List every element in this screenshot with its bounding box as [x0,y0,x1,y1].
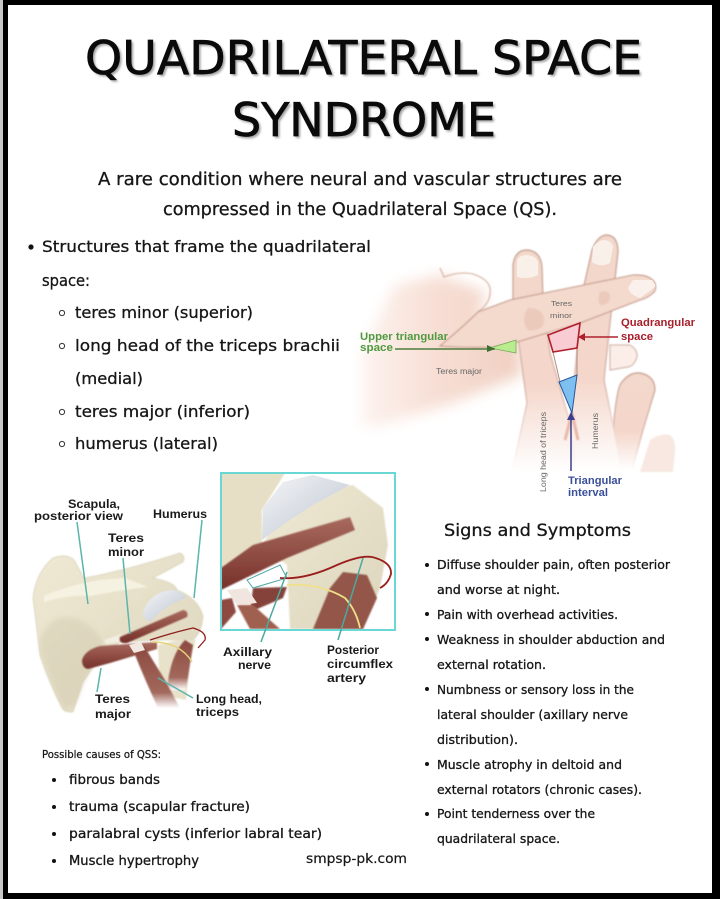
scapula bone [33,553,203,712]
list: signs and symptoms: Diffuse shoulder pain, often posterior [437,557,671,572]
list: signs and symptoms: external rotation. [437,657,546,672]
list: possible causes of QSS: fibrous bands [69,773,160,788]
subtitle: A rare condition where neural and vascular structures are [98,169,622,190]
illustration: scapula posterior view: triceps [196,705,239,719]
illustration: scapula posterior view [33,497,262,721]
list: signs and symptoms: distribution). [437,732,518,747]
tendon patch [104,634,122,644]
triangular interval [559,375,577,413]
label: long head triceps: Long head, [196,692,262,706]
illustration: hand model of the spaces: space [360,342,393,354]
cartilage [262,475,350,540]
scapula spine shading [44,578,148,602]
knuckle outline [440,268,490,312]
list: structures that frame the space: humerus (lateral) [75,434,218,453]
label: teres minor: Teres [551,299,572,308]
illustration: inset close-up [221,473,395,685]
list: structures that frame the space: space: [42,271,90,290]
list: signs and symptoms: and worse at night. [437,582,560,597]
title: QUADRILATERAL SPACE [87,33,644,87]
list: structures that frame the space: long head of the triceps brachii [75,336,340,355]
label: teres major: Teres [95,692,130,706]
list: structures that frame the space: teres minor (superior) [75,303,253,322]
list: signs and symptoms: external rotators (chronic cases). [437,782,642,797]
title: SYNDROME [232,93,496,147]
humerus bone [262,485,388,629]
vertical muscle shading [553,348,577,382]
list: structures that frame the space: (medial) [75,369,143,388]
list: signs and symptoms: Point tenderness over the [437,806,595,821]
list: signs and symptoms: quadrilateral space. [437,831,560,846]
teres major stub [250,587,287,612]
list: possible causes of QSS: Possible causes of QSS: [42,749,161,761]
triceps [237,605,280,629]
small finger [605,373,655,470]
upper triangular space [490,340,516,353]
finger: long head of triceps [512,250,575,472]
thumb remnant [640,435,675,472]
title: QUADRILATERAL SPACE [85,31,642,85]
quadrangular space [548,323,580,352]
illustration: hand model of the spaces [360,235,696,499]
illustration: inset close-up: artery [327,671,366,685]
subtitle: compressed in the Quadrilateral Space (QS). [163,199,557,220]
folded finger [610,345,637,370]
second triceps head [167,640,193,690]
pointer lines [77,520,202,698]
list: possible causes of QSS: Muscle hypertrophy [69,854,199,869]
illustration: hand model of the spaces: space [621,331,653,343]
title [85,31,644,149]
website credit: smpsp-pk.com [306,851,407,867]
upper left bone [221,473,285,575]
finger: humerus [565,235,622,472]
humeral shaft [158,640,196,700]
list: signs and symptoms [425,557,671,846]
illustration: scapula posterior view: major [95,707,131,721]
list: signs and symptoms: Weakness in shoulder abduction and [437,632,665,647]
list: signs and symptoms: lateral shoulder (axillary nerve [437,707,628,722]
list: signs and symptoms: Pain with overhead activities. [437,607,618,622]
illustration: scapula posterior view: posterior view [34,509,124,523]
teres minor muscle [120,610,188,643]
heading: signs and symptoms: Signs and Symptoms [444,521,631,541]
title: SYNDROME [234,95,498,149]
inset border [221,473,395,630]
pointer lines [261,558,363,642]
nerve [287,585,360,628]
label: upper triangular space: Upper triangular [360,331,449,343]
artery [280,557,391,588]
list: structures that frame the space: teres major (inferior) [75,402,250,421]
label: axillary nerve: Axillary [223,645,272,659]
artery and nerve [150,628,205,648]
illustration: scapula posterior view: minor [108,545,144,559]
label: teres minor: Teres [108,531,144,545]
label: quadrangular space: Quadrangular [621,317,696,329]
knuckle creases [524,291,610,330]
label: scapula: Scapula, [68,497,120,511]
teres minor [221,517,355,590]
label: humerus: Humerus [153,507,207,521]
tendon band [227,588,257,605]
forearm, fading to the left [362,275,522,428]
spaces arrows [395,337,618,471]
scapula shaded blade [40,618,105,708]
teres major muscle [82,642,157,669]
right muscle [313,572,377,629]
tendon band [129,642,145,653]
list: possible causes of QSS: paralabral cysts (inferior labral tear) [69,827,322,842]
illustration: inset close-up: nerve [238,658,271,672]
list: structures that frame the space: Structures that frame the quadrilateral [42,237,371,256]
fingernails [517,255,538,278]
subtitle [98,169,622,220]
illustration: inset close-up: circumflex [327,657,393,671]
finger: teres minor [440,275,656,347]
label: long head of triceps: Long head of triceps [539,412,548,492]
triceps long head [133,646,180,708]
window opening [247,565,287,588]
list: signs and symptoms: Numbness or sensory loss in the [437,682,634,697]
label: triangular interval: Triangular [568,475,623,487]
list: structures that frame the space [28,237,371,453]
illustration: hand model of the spaces: minor [550,311,573,320]
list: possible causes of QSS [42,749,322,869]
humeral head cartilage [143,590,186,622]
label: humerus: Humerus [591,413,600,449]
list: possible causes of QSS: trauma (scapular fracture) [69,800,250,815]
illustration: hand model of the spaces: interval [568,487,608,499]
label: posterior circumflex artery: Posterior [327,643,379,657]
list: signs and symptoms: Muscle atrophy in deltoid and [437,757,622,772]
label: teres major: Teres major [436,367,482,376]
